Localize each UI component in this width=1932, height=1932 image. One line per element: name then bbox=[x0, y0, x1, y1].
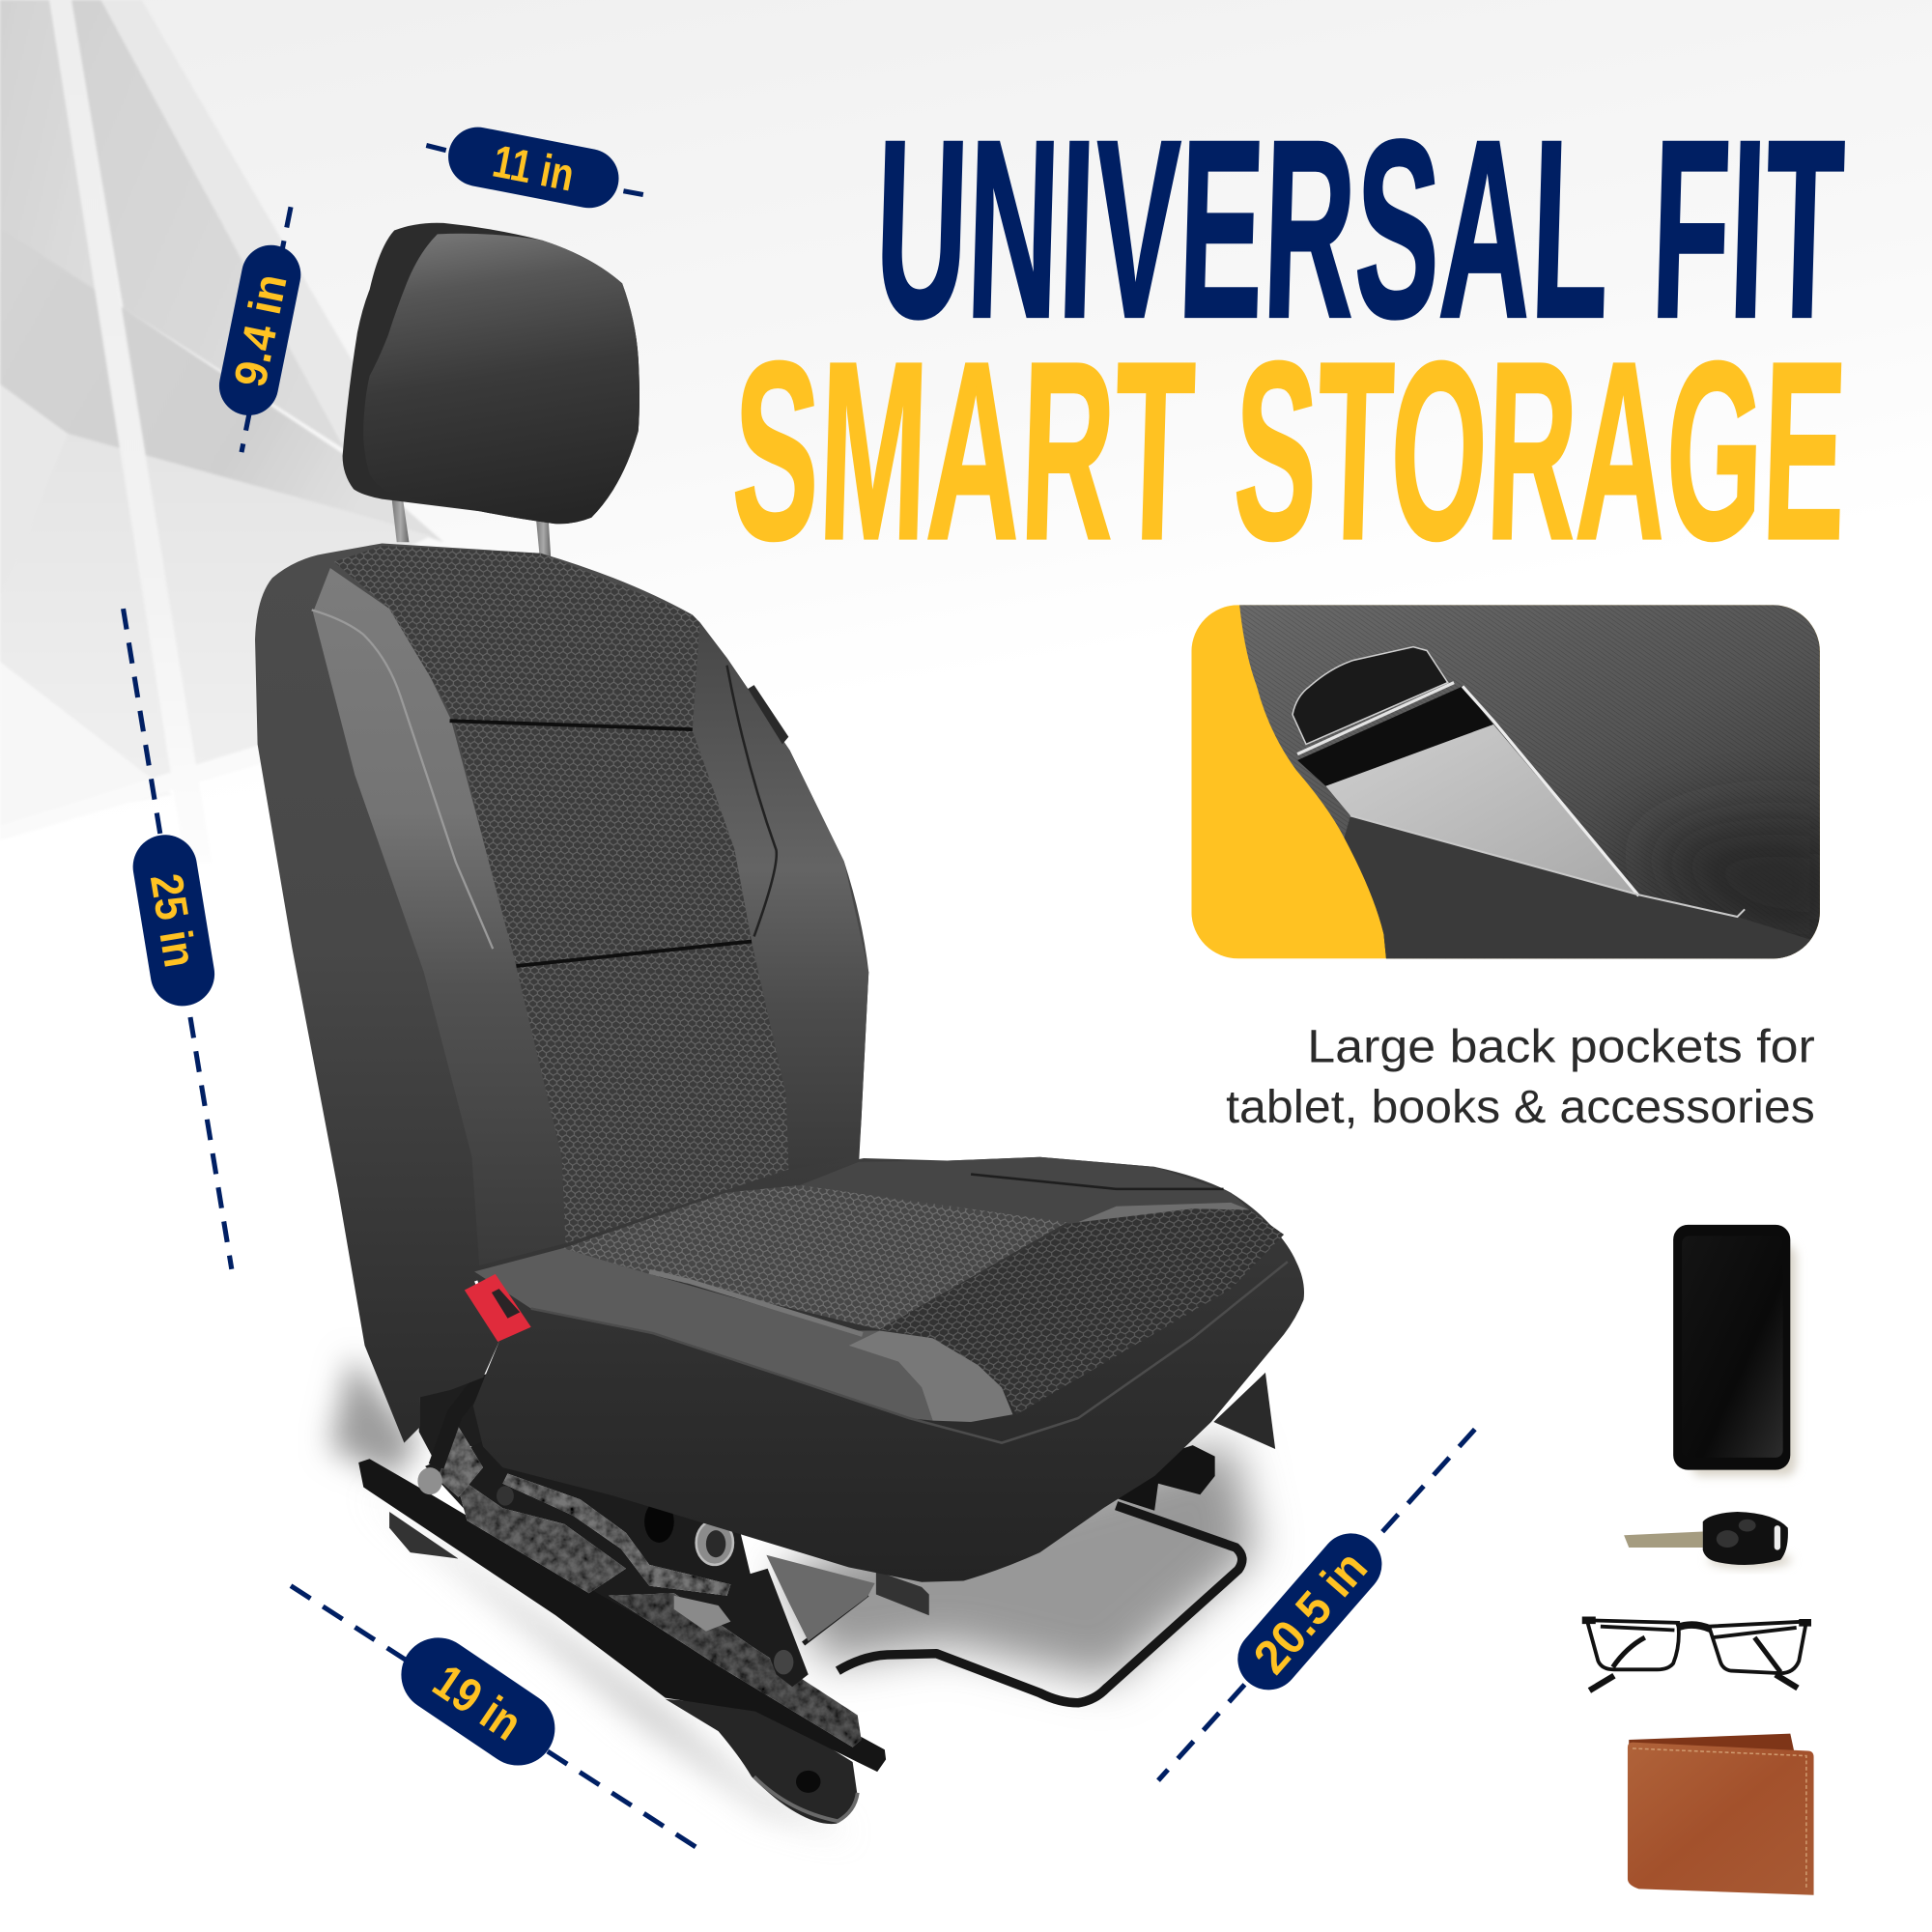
inner dark cavity bbox=[425, 1441, 856, 1731]
rear leather seam bbox=[971, 1175, 1224, 1189]
headrest bbox=[343, 223, 639, 524]
seams bbox=[450, 721, 752, 966]
silver card bbox=[1325, 724, 1637, 895]
bushing ring bbox=[696, 1520, 733, 1565]
front leg bbox=[739, 1569, 809, 1687]
red tab bbox=[465, 1274, 531, 1342]
rear support strut bbox=[804, 1595, 867, 1644]
lower plate metal bbox=[455, 1475, 626, 1593]
heading line 2: SMART bbox=[729, 308, 1198, 592]
seat cushion bbox=[473, 1157, 1304, 1582]
description text: Large back pockets for bbox=[1307, 1020, 1815, 1072]
tab slot bbox=[492, 1289, 520, 1319]
icon: glasses bbox=[1582, 1620, 1811, 1690]
under-seat bracket bbox=[1117, 1445, 1215, 1511]
panel: back pocket photo bbox=[1191, 605, 1848, 961]
lower fabric panel bbox=[516, 943, 788, 1243]
front corner leather bbox=[849, 1331, 1012, 1422]
pivot bolt bbox=[497, 1486, 514, 1506]
lower foot bbox=[666, 1699, 858, 1824]
floor shadow bbox=[330, 1355, 1257, 1836]
dimension: 11 in: 11 in bbox=[489, 135, 578, 202]
foot edge bbox=[754, 1776, 858, 1821]
black card top bbox=[1293, 647, 1448, 744]
rear mottled block bbox=[438, 1427, 483, 1497]
bushing hole bbox=[706, 1530, 725, 1557]
seat bbox=[255, 223, 1304, 1824]
rear foot bbox=[389, 1512, 458, 1559]
dimension: 20.5 in bbox=[1158, 1430, 1475, 1780]
card right edge bbox=[1463, 686, 1638, 895]
upper fabric panel bbox=[334, 546, 699, 728]
dimension: 11 in bbox=[426, 122, 643, 213]
rear belt arm bbox=[437, 1378, 483, 1466]
rear leather bbox=[800, 1157, 1249, 1224]
cushion base bbox=[473, 1157, 1304, 1582]
dark fold bbox=[1638, 817, 1848, 961]
title bbox=[729, 87, 1850, 592]
icon: car key bbox=[1624, 1512, 1792, 1569]
right piping bbox=[727, 666, 777, 936]
middle fabric panel bbox=[455, 724, 752, 966]
dimension: 25 in bbox=[124, 609, 232, 1269]
under cushion flap bbox=[876, 1571, 929, 1615]
dimension: 19 in: 19 in bbox=[424, 1654, 531, 1751]
bent strip metal bbox=[502, 1474, 730, 1596]
dimension: 9.4 in: 9.4 in bbox=[225, 270, 298, 391]
fabric seat back bbox=[1239, 605, 1820, 958]
tube frame bbox=[838, 1506, 1242, 1703]
description text: tablet, books & accessories bbox=[1226, 1081, 1815, 1133]
rear bolt bbox=[417, 1467, 442, 1494]
fabric twill bbox=[1239, 605, 1820, 958]
yellow panel background bbox=[1191, 605, 1820, 958]
leg bolt bbox=[774, 1650, 793, 1674]
right bolster bbox=[693, 622, 868, 1171]
lower leather pocket bbox=[1345, 815, 1820, 958]
headrest front panel bbox=[363, 234, 639, 524]
left leather bbox=[474, 1248, 933, 1421]
bolster piping bbox=[312, 610, 493, 949]
dimension: 20.5 in: 20.5 in bbox=[1243, 1541, 1378, 1684]
shadow plate under seat bbox=[766, 1555, 875, 1641]
center fabric bbox=[563, 1185, 1067, 1329]
seat belt buckle bbox=[465, 1274, 531, 1342]
side tag bbox=[748, 685, 788, 744]
dimension: 25 in: 25 in bbox=[140, 870, 206, 971]
headrest posts bbox=[392, 499, 551, 557]
seat rail mechanism bbox=[358, 1373, 1275, 1824]
dimension: 19 in bbox=[291, 1586, 707, 1855]
dimension: 9.4 in bbox=[213, 207, 306, 452]
main rail bbox=[358, 1459, 886, 1772]
black strip bbox=[1297, 686, 1493, 786]
disc bbox=[674, 1596, 730, 1632]
strip highlight bbox=[1297, 683, 1454, 754]
left bolster bbox=[313, 568, 565, 1265]
seat side flap bbox=[1213, 1373, 1275, 1449]
pocket seam bbox=[1350, 815, 1745, 917]
foot hole bbox=[796, 1771, 820, 1793]
channel metal bbox=[609, 1593, 862, 1747]
rear cavity bbox=[419, 1374, 487, 1466]
rear highlight wedge bbox=[1078, 1203, 1249, 1222]
inner trim bbox=[649, 1271, 863, 1334]
backrest bbox=[255, 543, 868, 1443]
hole bbox=[644, 1501, 674, 1543]
front ridge bbox=[531, 1262, 1288, 1443]
description text bbox=[1226, 1020, 1815, 1133]
icon: phone bbox=[1673, 1225, 1797, 1476]
icon: wallet bbox=[1628, 1734, 1814, 1895]
outer shell bbox=[255, 543, 868, 1443]
right fabric bbox=[880, 1208, 1284, 1414]
